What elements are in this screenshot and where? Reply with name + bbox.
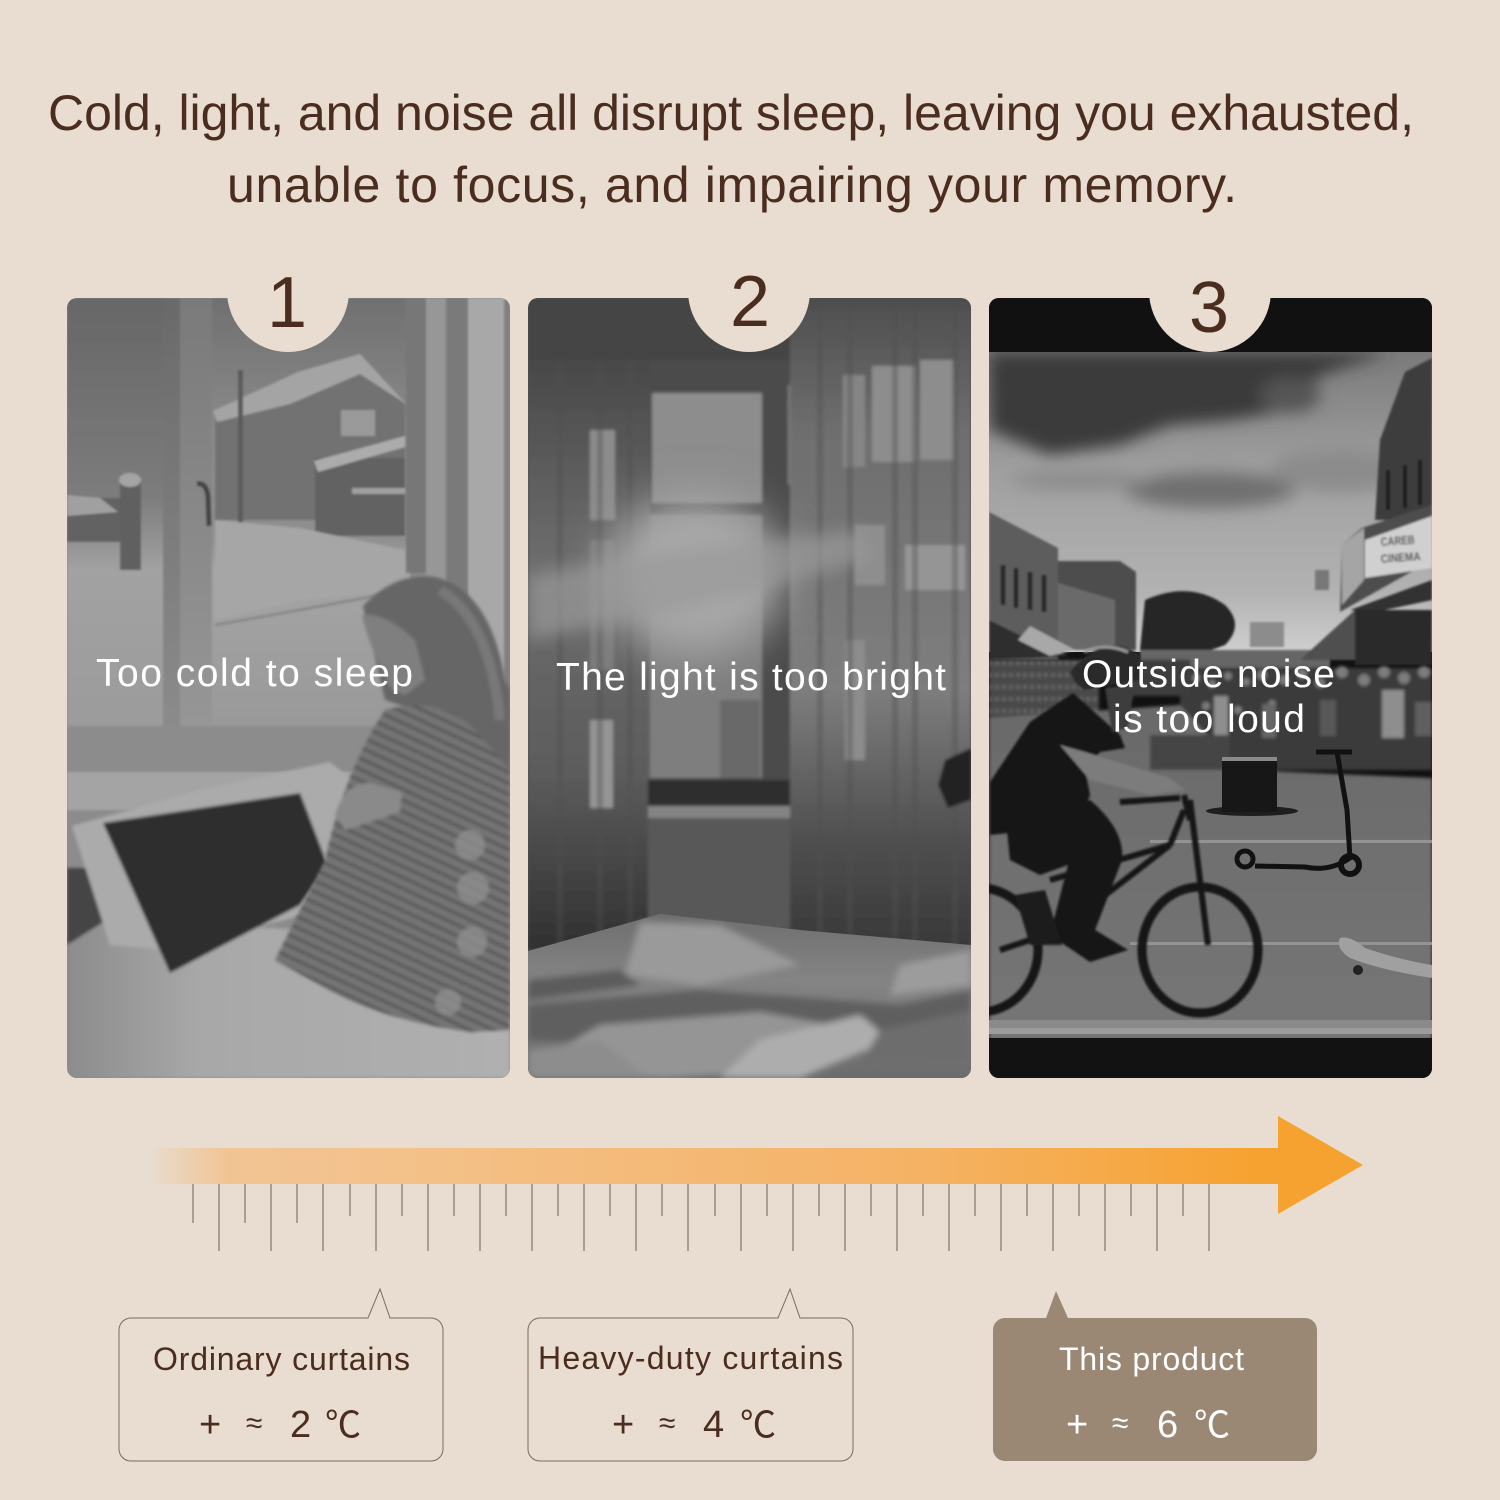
photo: bed — [528, 914, 971, 1078]
callout: this product: This product — [1059, 1341, 1244, 1377]
callout: ordinary curtains: 2 — [290, 1404, 311, 1446]
callout: ordinary curtains: ≈ — [246, 1407, 262, 1440]
photo: street buildings: CINEMA — [1380, 549, 1421, 566]
callout: this product: 6 — [1157, 1404, 1178, 1446]
callout: ordinary curtains — [119, 1289, 443, 1461]
callout: this product: ≈ — [1112, 1407, 1128, 1440]
arrow — [150, 1116, 1363, 1214]
label: too loud — [1082, 653, 1335, 741]
ruler ticks — [193, 1184, 1209, 1251]
photo: woman in sweater — [275, 576, 510, 1032]
heading: Cold, light, and noise all disrupt sleep, leaving you exhausted, — [48, 85, 1414, 141]
photo: sky — [989, 352, 1432, 652]
panel: light too bright — [528, 298, 971, 1078]
photo: skateboard — [1339, 937, 1432, 978]
notch 2 with number: 2 — [730, 262, 770, 342]
notch 1 with number: 1 — [267, 263, 307, 343]
photo: road marks — [989, 840, 1432, 1034]
callout: heavy-duty curtains: ℃ — [740, 1404, 776, 1445]
label: too cold: Too cold to sleep — [96, 652, 413, 695]
photo: street buildings — [989, 358, 1432, 670]
photo: crowd — [989, 660, 1432, 1040]
panel: too cold to sleep — [67, 298, 510, 1078]
notch 1 with number — [215, 230, 361, 352]
panel: outside noise — [989, 298, 1432, 1078]
callout: this product — [993, 1291, 1317, 1461]
photo: bed and pillows — [67, 762, 510, 1078]
label: too loud: is too loud — [1113, 698, 1305, 741]
notch 3 with number: 3 — [1189, 268, 1229, 348]
callout: ordinary curtains: + — [199, 1404, 221, 1446]
callout: heavy-duty curtains: 4 — [703, 1404, 724, 1446]
callout: ordinary curtains: Ordinary curtains — [153, 1341, 410, 1377]
callout: this product: + — [1066, 1404, 1088, 1446]
callout: heavy-duty curtains — [528, 1289, 853, 1461]
heading — [48, 85, 1414, 213]
label: too bright: The light is too bright — [556, 656, 946, 699]
photo: scooter — [1237, 752, 1359, 874]
photo: cyclist — [989, 644, 1264, 1019]
photo: snowy window — [67, 298, 510, 811]
photo: window and curtains — [528, 298, 971, 950]
callout: this product: ℃ — [1194, 1404, 1230, 1445]
photo: street buildings: CAREB — [1380, 533, 1415, 549]
label: too loud: Outside noise — [1082, 653, 1335, 696]
callout: heavy-duty curtains: + — [612, 1404, 634, 1446]
photo: amplifier — [1206, 757, 1298, 816]
callout: heavy-duty curtains: ≈ — [659, 1407, 675, 1440]
notch 2 with number — [676, 230, 822, 352]
light flare — [528, 495, 870, 655]
callout: heavy-duty curtains: Heavy-duty curtains — [538, 1340, 843, 1376]
heading: unable to focus, and impairing your memory. — [227, 157, 1237, 213]
notch 3 with number — [1137, 230, 1283, 352]
callout: ordinary curtains: ℃ — [325, 1404, 361, 1445]
